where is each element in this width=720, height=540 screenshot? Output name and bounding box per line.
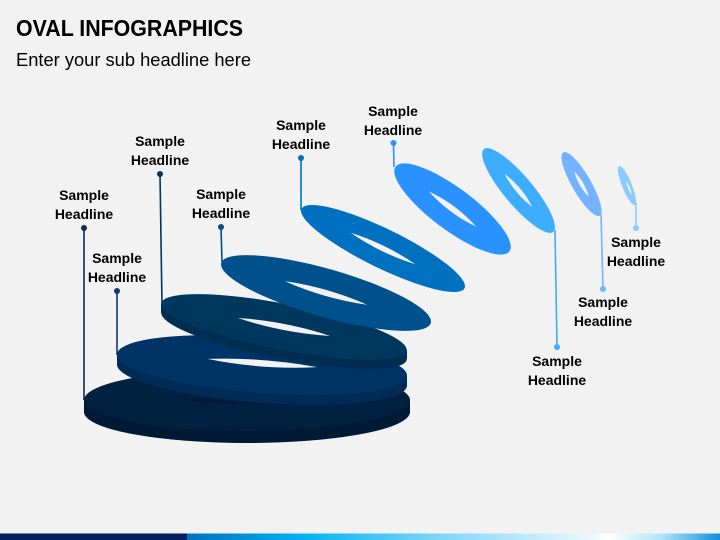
oval 9 with connector	[615, 164, 639, 231]
label 6: Headline	[364, 122, 422, 138]
oval 2 with connector	[114, 288, 409, 414]
label 2	[88, 250, 146, 285]
label 7	[528, 353, 586, 388]
label 5: Sample	[276, 117, 326, 133]
label 5	[272, 117, 330, 152]
label 4: Headline	[192, 205, 250, 221]
oval 4 with connector	[215, 224, 437, 346]
label 4: Sample	[196, 186, 246, 202]
oval 6 with connector	[383, 140, 522, 268]
label 1: Headline	[55, 206, 113, 222]
label 8	[574, 294, 632, 329]
label 2: Sample	[92, 250, 142, 266]
label 1: Sample	[59, 187, 109, 203]
label 1	[55, 187, 113, 222]
label 9	[607, 234, 665, 269]
label 6: Sample	[368, 103, 418, 119]
label 2: Headline	[88, 269, 146, 285]
label 3: Headline	[131, 152, 189, 168]
title: OVAL INFOGRAPHICS	[16, 15, 243, 41]
label 9: Sample	[611, 234, 661, 250]
label 8: Sample	[578, 294, 628, 310]
label 4	[192, 186, 250, 221]
oval 8 with connector	[555, 148, 608, 292]
label 5: Headline	[272, 136, 330, 152]
label 8: Headline	[574, 313, 632, 329]
oval 5 with connector	[293, 155, 473, 306]
subtitle: Enter your sub headline here	[16, 50, 251, 70]
oval 3 with connector	[157, 171, 411, 382]
bottom colour bar	[0, 534, 720, 540]
label 9: Headline	[607, 253, 665, 269]
label 7: Sample	[532, 353, 582, 369]
label 3: Sample	[135, 133, 185, 149]
label 6	[364, 103, 422, 138]
oval 7 with connector	[473, 140, 564, 350]
label 3	[131, 133, 189, 168]
oval 1: bottom disk with connector	[81, 225, 410, 443]
label 7: Headline	[528, 372, 586, 388]
